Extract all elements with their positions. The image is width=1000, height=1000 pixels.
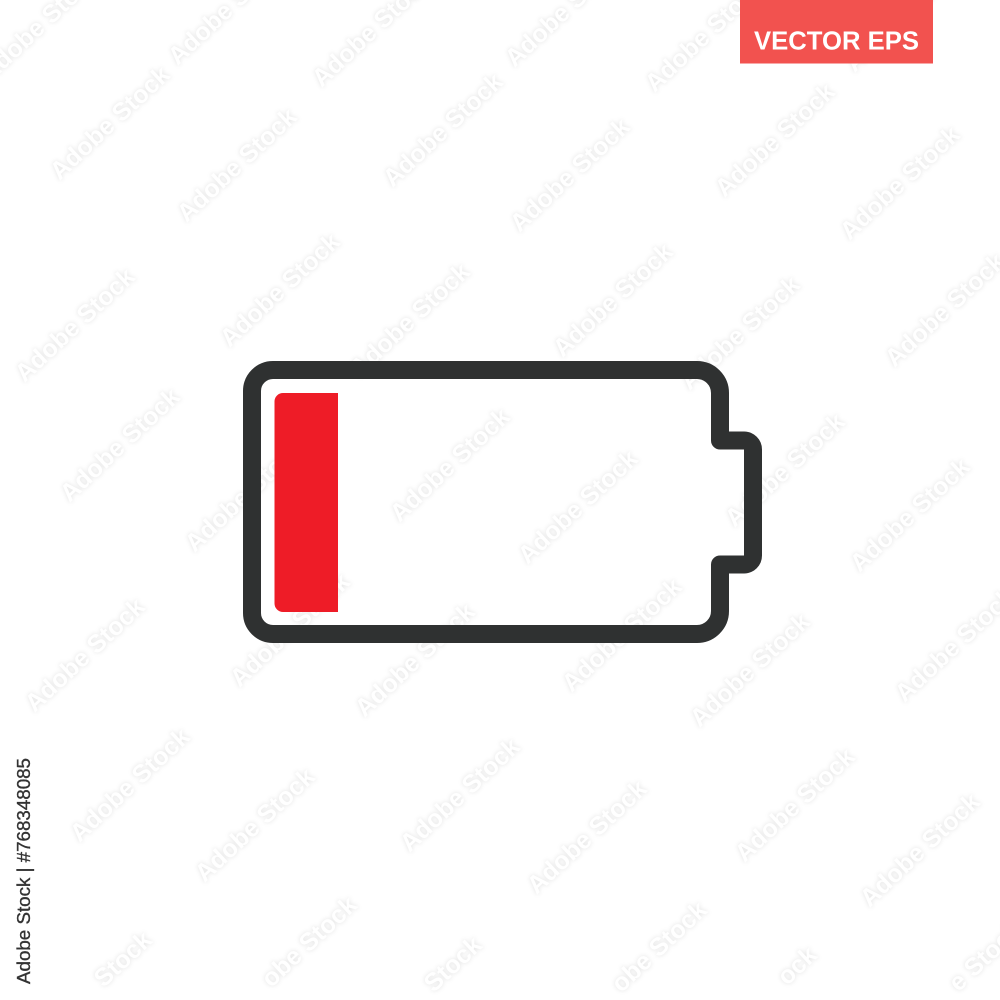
watermark: Adobe Stock lattice: Stock bbox=[89, 926, 158, 993]
watermark: Adobe Stock lattice: Adobe Stock bbox=[710, 78, 840, 202]
badge label: VECTOR EPS bbox=[754, 28, 919, 56]
watermark: Adobe Stock lattice: Adobe Stock bbox=[395, 733, 525, 857]
watermark: Adobe Stock lattice: Adobe Stock bbox=[730, 743, 860, 867]
watermark: Adobe Stock lattice: obe Stock bbox=[256, 891, 363, 993]
watermark: Adobe Stock lattice: Adobe Stock bbox=[10, 263, 140, 387]
watermark: Adobe Stock lattice: Adobe Stock bbox=[675, 271, 805, 395]
watermark: Adobe Stock lattice: Adobe Stock bbox=[20, 593, 150, 717]
watermark: Adobe Stock lattice: Adobe Stock bbox=[557, 573, 687, 697]
icon: low battery bbox=[252, 370, 753, 634]
watermark: Adobe Stock lattice: Adobe Stock bbox=[505, 113, 635, 237]
watermark: Adobe Stock lattice: obe Stock bbox=[606, 896, 713, 998]
watermark: Adobe Stock lattice: Adobe Stock bbox=[522, 775, 652, 899]
watermark: Adobe Stock lattice: Adobe Stock bbox=[345, 258, 475, 382]
watermark: Adobe Stock lattice: Adobe Stock bbox=[685, 608, 815, 732]
watermark: Adobe Stock lattice: Adobe Stock bbox=[65, 723, 195, 847]
watermark: Adobe Stock lattice: ock bbox=[772, 941, 823, 991]
battery outline bbox=[252, 370, 753, 634]
badge: vector eps bbox=[740, 0, 933, 64]
watermark: Adobe Stock lattice: Adobe Stock bbox=[180, 433, 310, 557]
watermark: Adobe Stock lattice: Stock bbox=[419, 931, 488, 998]
watermark: Adobe Stock lattice: Adobe Stock bbox=[45, 61, 175, 185]
stock id text: Adobe Stock | #768348085 bbox=[13, 758, 34, 984]
watermark: Adobe Stock lattice: Adobe Stock bbox=[513, 445, 643, 569]
watermark: Adobe Stock lattice: Adobe Stock bbox=[720, 408, 850, 532]
watermark: Adobe Stock lattice: Adobe Stock bbox=[548, 238, 678, 362]
watermark: Adobe Stock lattice: Adobe Stock bbox=[378, 68, 508, 192]
watermark: Adobe Stock lattice: Adobe Stock bbox=[225, 568, 355, 692]
badge background bbox=[740, 0, 933, 64]
watermark: Adobe Stock lattice: Adobe Stock bbox=[190, 763, 320, 887]
watermark: Adobe Stock lattice: Adobe Stock bbox=[845, 453, 975, 577]
watermark: Adobe Stock lattice: Adobe Stock bbox=[350, 598, 480, 722]
watermark: Adobe Stock lattice: Adobe Stock bbox=[172, 103, 302, 227]
watermark: Adobe Stock lattice: Adobe Stock bbox=[855, 788, 985, 912]
red charge level bbox=[274, 393, 338, 612]
watermark: Adobe Stock lattice: Adobe Stock bbox=[385, 403, 515, 527]
watermark: Adobe Stock lattice: Adobe Stock bbox=[835, 121, 965, 245]
watermark: Adobe Stock lattice: Adobe Stock bbox=[215, 228, 345, 352]
watermark: Adobe Stock lattice: Adobe Stock bbox=[55, 383, 185, 507]
